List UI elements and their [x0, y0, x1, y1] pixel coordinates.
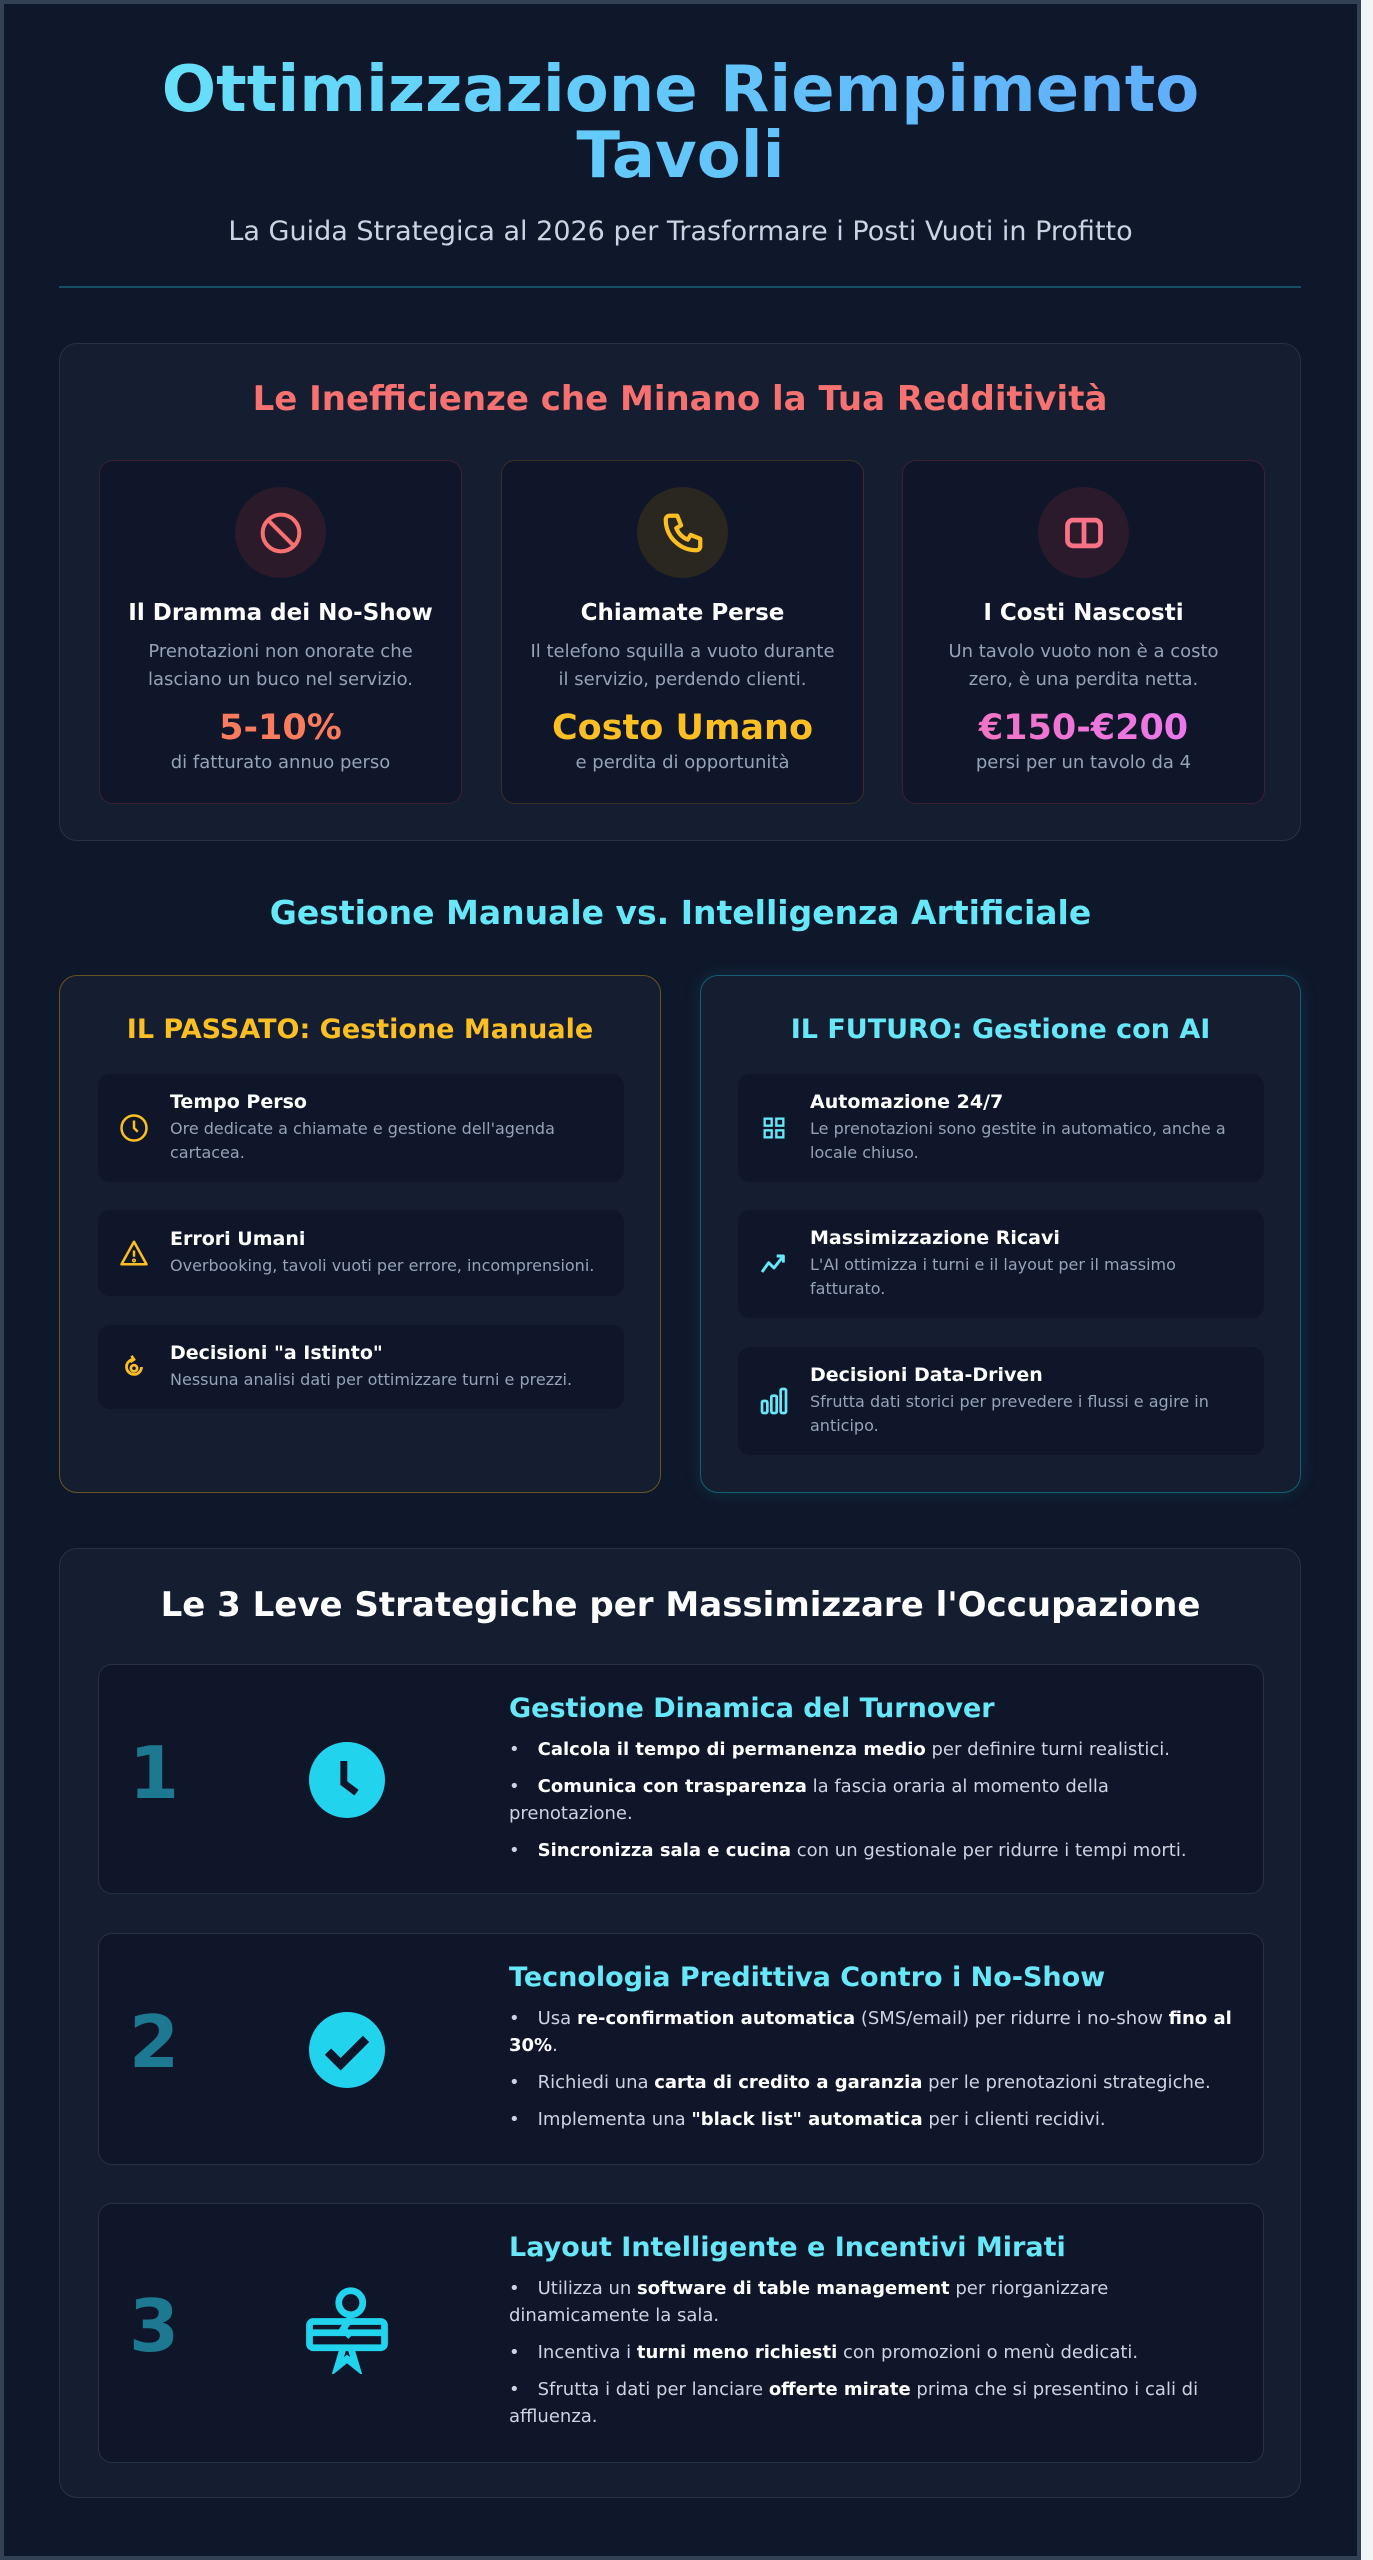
item: massimizzazione — [738, 1210, 1264, 1318]
icon: phone — [637, 487, 728, 578]
text: turnover: Sincronizza sala e cucina con un gestionale per ridurre i tempi morti. — [538, 1840, 1187, 1861]
item: decisioni a istinto — [98, 1325, 624, 1409]
card: costi nascosti: zero, è una perdita netta. — [969, 669, 1198, 690]
icon: clock — [309, 1742, 385, 1818]
item: tempo perso: cartacea. — [170, 1143, 245, 1162]
card: costi nascosti: €150-€200 — [979, 708, 1188, 748]
text: layout: dinamicamente la sala. — [509, 2305, 719, 2326]
item: errori umani: Overbooking, tavoli vuoti per errore, incomprensioni. — [170, 1256, 594, 1275]
text: no-show: Implementa una "black list" automatica per i clienti recidivi. — [538, 2109, 1106, 2130]
lever 3 — [98, 2203, 1264, 2463]
text: layout: Layout Intelligente e Incentivi Mirati — [509, 2232, 1066, 2263]
icon: award — [306, 2287, 388, 2374]
heading: manuale vs AI: Gestione Manuale vs. Intelligenza Artificiale — [270, 893, 1091, 932]
text: no-show: Richiedi una carta di credito a garanzia per le prenotazioni strategiche. — [538, 2072, 1211, 2093]
icon: table — [1038, 487, 1129, 578]
card: no-show — [99, 460, 462, 804]
card: no-show: Il Dramma dei No-Show — [128, 600, 433, 626]
heading: 3 leve: Le 3 Leve Strategiche per Massimizzare l'Occupazione — [161, 1585, 1200, 1625]
card: no-show: Prenotazioni non onorate che — [148, 641, 413, 662]
lever 1 — [98, 1664, 1264, 1894]
item: data-driven: Decisioni Data-Driven — [810, 1364, 1043, 1386]
item: automazione: Automazione 24/7 — [810, 1091, 1003, 1113]
number 2: 2 — [129, 2000, 179, 2084]
text: turnover: Calcola il tempo di permanenza medio per definire turni realistici. — [538, 1739, 1170, 1760]
text: turnover: prenotazione. — [509, 1803, 633, 1824]
panel title: futuro: IL FUTURO: Gestione con AI — [791, 1014, 1210, 1045]
item: massimizzazione: L'AI ottimizza i turni e il layout per il massimo — [810, 1255, 1176, 1274]
text: turnover: Comunica con trasparenza la fascia oraria al momento della — [538, 1776, 1109, 1797]
item: decisioni a istinto: Decisioni "a Istinto" — [170, 1342, 383, 1364]
panel title: passato: IL PASSATO: Gestione Manuale — [127, 1014, 593, 1045]
item: automazione — [738, 1074, 1264, 1182]
card: chiamate perse: Il telefono squilla a vuoto durante — [530, 641, 835, 662]
card: costi nascosti: persi per un tavolo da 4 — [976, 752, 1191, 773]
item: tempo perso — [98, 1074, 624, 1182]
card: chiamate perse — [501, 460, 864, 804]
lever 2 — [98, 1933, 1264, 2165]
card: chiamate perse: il servizio, perdendo clienti. — [559, 669, 806, 690]
item: tempo perso: Ore dedicate a chiamate e gestione dell'agenda — [170, 1119, 555, 1138]
text: no-show — [509, 1962, 1232, 2130]
item: massimizzazione: Massimizzazione Ricavi — [810, 1227, 1060, 1249]
subtitle: La Guida Strategica al 2026 per Trasformare i Posti Vuoti in Profitto — [228, 216, 1133, 247]
text: turnover: Gestione Dinamica del Turnover — [509, 1693, 995, 1724]
item: errori umani: Errori Umani — [170, 1228, 305, 1250]
number 1: 1 — [129, 1731, 179, 1815]
heading: inefficienze: Le Inefficienze che Minano la Tua Redditività — [253, 379, 1107, 419]
card: chiamate perse: e perdita di opportunità — [575, 752, 790, 773]
panel: passato — [59, 975, 661, 1493]
item: errori umani — [98, 1210, 624, 1296]
card: costi nascosti — [902, 460, 1265, 804]
text: no-show: Tecnologia Predittiva Contro i No-Show — [509, 1962, 1105, 1993]
text: layout: Incentiva i turni meno richiesti con promozioni o menù dedicati. — [538, 2342, 1138, 2363]
card: chiamate perse: Chiamate Perse — [581, 600, 784, 626]
icon: ban — [235, 487, 326, 578]
text: no-show: Usa re-confirmation automatica (SMS/email) per ridurre i no-show fino al — [538, 2008, 1232, 2029]
title — [0, 57, 1361, 189]
number 3: 3 — [129, 2284, 179, 2368]
text: layout — [509, 2232, 1198, 2427]
text: no-show: 30%. — [509, 2035, 558, 2056]
item: data-driven: anticipo. — [810, 1416, 879, 1435]
card: costi nascosti: I Costi Nascosti — [983, 600, 1184, 626]
card: no-show: di fatturato annuo perso — [171, 752, 390, 773]
text: layout: Utilizza un software di table management per riorganizzare — [538, 2278, 1108, 2299]
text: layout: Sfrutta i dati per lanciare offerte mirate prima che si presentino i cali di — [538, 2379, 1198, 2400]
card: no-show: lasciano un buco nel servizio. — [148, 669, 413, 690]
icon: check — [309, 2012, 385, 2088]
item: massimizzazione: fatturato. — [810, 1279, 885, 1298]
card: costi nascosti: Un tavolo vuoto non è a costo — [948, 641, 1219, 662]
item: tempo perso: Tempo Perso — [170, 1091, 307, 1113]
item: automazione: Le prenotazioni sono gestite in automatico, anche a — [810, 1119, 1226, 1138]
item: automazione: locale chiuso. — [810, 1143, 919, 1162]
item: data-driven: Sfrutta dati storici per prevedere i flussi e agire in — [810, 1392, 1209, 1411]
card: chiamate perse: Costo Umano — [552, 708, 813, 748]
text: layout: affluenza. — [509, 2406, 598, 2427]
item: decisioni a istinto: Nessuna analisi dati per ottimizzare turni e prezzi. — [170, 1370, 572, 1389]
card: no-show: 5-10% — [219, 708, 342, 748]
text: turnover — [509, 1693, 1187, 1861]
panel: futuro — [700, 975, 1301, 1493]
panel: 3 leve — [59, 1548, 1301, 2498]
item: data-driven — [738, 1347, 1264, 1455]
panel: inefficienze — [59, 343, 1301, 841]
